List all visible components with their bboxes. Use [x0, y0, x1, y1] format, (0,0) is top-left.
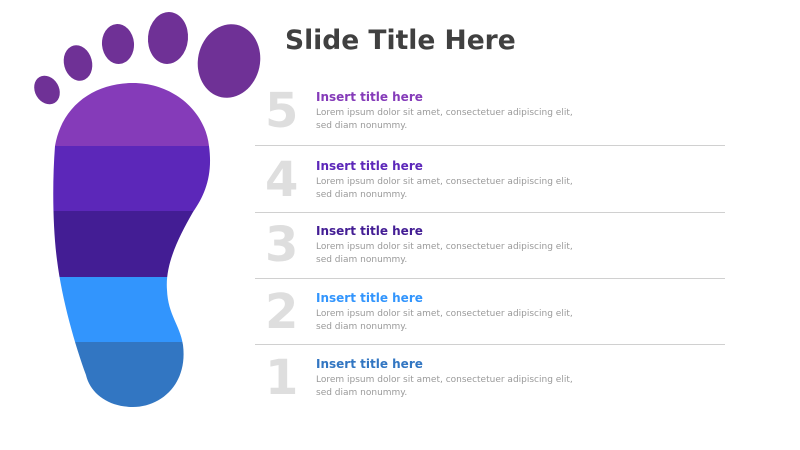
item 1: Insert title here [316, 357, 423, 371]
icon: footprint [34, 12, 260, 407]
item 4: Insert title here [316, 159, 423, 173]
item 2: 2 [265, 284, 298, 340]
item 2: Lorem ipsum dolor sit amet, consectetuer adipiscing elit, [316, 309, 573, 319]
item 5: Lorem ipsum dolor sit amet, consectetuer adipiscing elit, [316, 108, 573, 118]
item 1: Lorem ipsum dolor sit amet, consectetuer adipiscing elit, [316, 375, 573, 385]
item 3: 3 [265, 217, 298, 273]
item 1 [265, 350, 573, 406]
title: Slide Title Here [285, 25, 516, 56]
item 4: sed diam nonummy. [316, 190, 407, 200]
item 5: Insert title here [316, 90, 423, 104]
item 3: sed diam nonummy. [316, 254, 407, 264]
item 3 [265, 217, 573, 273]
item 4 [265, 152, 573, 208]
item 3: Lorem ipsum dolor sit amet, consectetuer adipiscing elit, [316, 242, 573, 252]
item 2 [265, 284, 573, 340]
item 1: 1 [265, 350, 298, 406]
item 3: Insert title here [316, 224, 423, 238]
item 2: sed diam nonummy. [316, 322, 407, 332]
item 4: 4 [265, 152, 298, 208]
item 5: sed diam nonummy. [316, 120, 407, 130]
item 1: sed diam nonummy. [316, 388, 407, 398]
item 2: Insert title here [316, 291, 423, 305]
item 4: Lorem ipsum dolor sit amet, consectetuer adipiscing elit, [316, 177, 573, 187]
item 5: 5 [265, 83, 298, 139]
item 5 [265, 83, 573, 139]
